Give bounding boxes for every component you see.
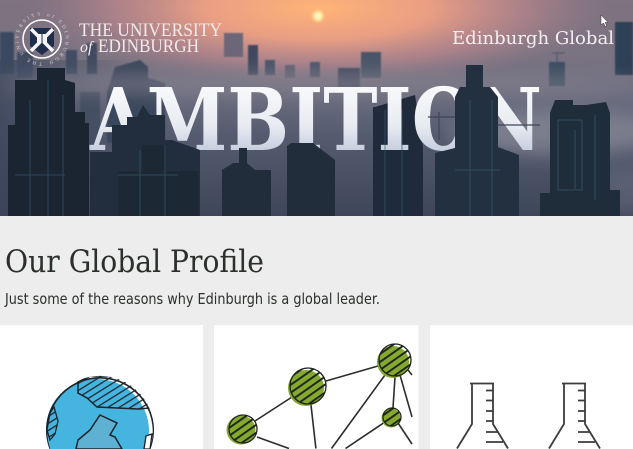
hero banner <box>0 0 633 216</box>
panel: flasks card <box>430 325 633 449</box>
Edinburgh Global label: Edinburgh Global <box>452 28 614 49</box>
logo: University crest: THE UNIVERSITY of EDINBURGH <box>15 12 69 66</box>
heading: Our Global Profile <box>5 244 264 280</box>
AMBITION headline: AMBITION <box>89 70 542 171</box>
icon: right flask <box>549 384 600 448</box>
panel: network card <box>214 325 418 449</box>
fog bands <box>0 74 633 215</box>
icon: network diagram <box>226 344 412 448</box>
logo: University wordmark <box>79 24 222 56</box>
tower behind the headline <box>373 95 423 216</box>
icon: globe <box>45 376 154 449</box>
logo: University wordmark: EDINBURGH <box>98 37 199 57</box>
sunset sky <box>0 0 633 216</box>
logo: University wordmark: THE UNIVERSITY <box>79 21 222 41</box>
tower window details <box>15 80 595 216</box>
intro text: Just some of the reasons why Edinburgh is a global leader. <box>4 290 380 308</box>
distant hazy skyline <box>0 22 633 152</box>
logo: University wordmark: of <box>80 39 95 56</box>
foreground towers <box>8 65 620 216</box>
mouse cursor icon <box>601 15 608 26</box>
icon: left flask <box>457 384 508 448</box>
panel: globe card <box>0 325 203 449</box>
crane <box>428 112 540 140</box>
